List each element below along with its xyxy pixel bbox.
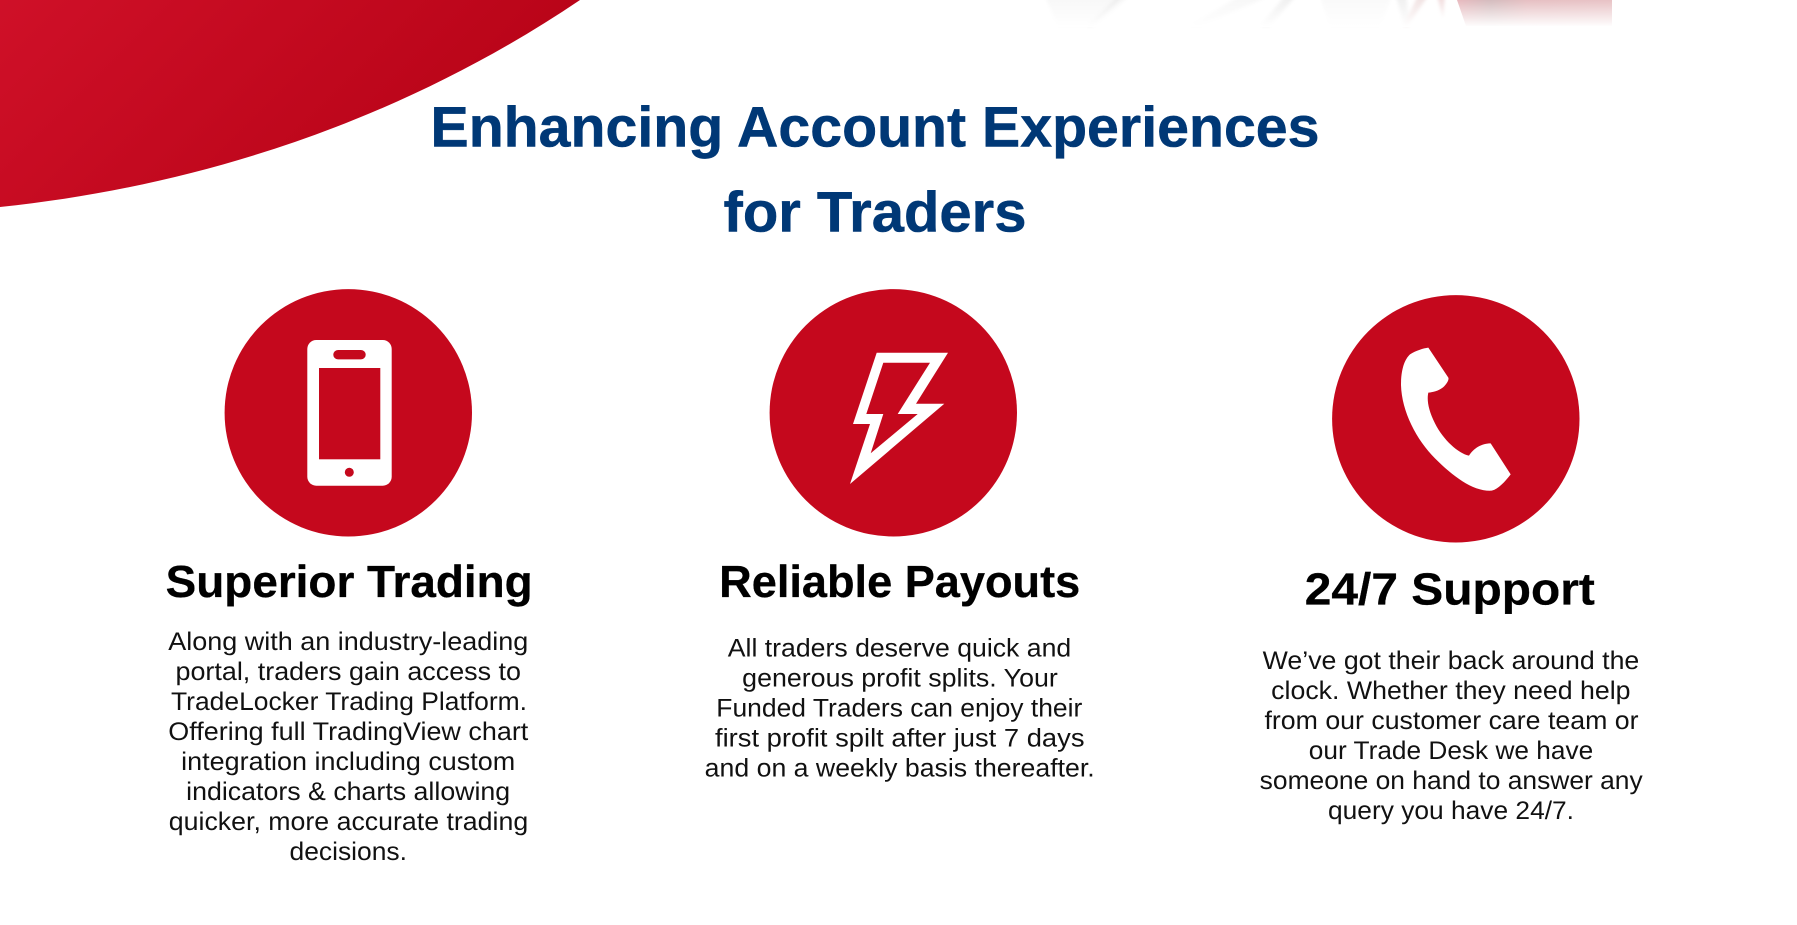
body text: superior trading: Offering full TradingView chart [168, 718, 528, 746]
body text: 24/7 support: We’ve got their back around the [1263, 647, 1639, 675]
panel: superior trading [166, 289, 533, 866]
body text: superior trading: Along with an industry-leading [168, 628, 528, 656]
body text: reliable payouts [705, 635, 1095, 783]
title: Enhancing Account Experiences [430, 96, 1320, 160]
body text: superior trading [168, 628, 528, 866]
icon: smartphone [225, 289, 472, 536]
body text: superior trading: TradeLocker Trading Platform. [171, 688, 527, 716]
faded photo remnant at top right [1040, 0, 1620, 27]
body text: reliable payouts: All traders deserve quick and [728, 635, 1071, 663]
panel: reliable payouts [705, 289, 1095, 783]
body text: superior trading: indicators & charts allowing [186, 778, 510, 806]
heading: reliable payouts: Reliable Payouts [719, 556, 1080, 607]
body text: 24/7 support: query you have 24/7. [1328, 797, 1574, 825]
body text: reliable payouts: and on a weekly basis thereafter. [705, 755, 1095, 783]
body text: reliable payouts: Funded Traders can enjoy their [716, 695, 1083, 723]
body text: 24/7 support [1260, 647, 1643, 825]
body text: reliable payouts: first profit spilt after just 7 days [715, 725, 1084, 753]
heading: 24/7 support: 24/7 Support [1305, 564, 1595, 614]
body text: reliable payouts: generous profit splits. Your [742, 665, 1058, 693]
icon: lightning bolt [770, 289, 1017, 536]
body text: 24/7 support: our Trade Desk we have [1309, 737, 1593, 765]
heading: superior trading: Superior Trading [166, 556, 533, 607]
body text: 24/7 support: clock. Whether they need help [1271, 677, 1630, 705]
body text: superior trading: quicker, more accurate trading [169, 808, 528, 836]
icon: telephone handset [1332, 295, 1580, 542]
decorative red corner shape [0, 0, 580, 207]
body text: 24/7 support: from our customer care team or [1264, 707, 1639, 735]
body text: 24/7 support: someone on hand to answer any [1260, 767, 1643, 795]
body text: superior trading: decisions. [290, 838, 407, 866]
body text: superior trading: portal, traders gain access to [176, 658, 521, 686]
body text: superior trading: integration including custom [181, 748, 515, 776]
title [430, 96, 1320, 244]
title: for Traders [724, 180, 1026, 244]
panel: 24/7 support [1260, 295, 1643, 825]
